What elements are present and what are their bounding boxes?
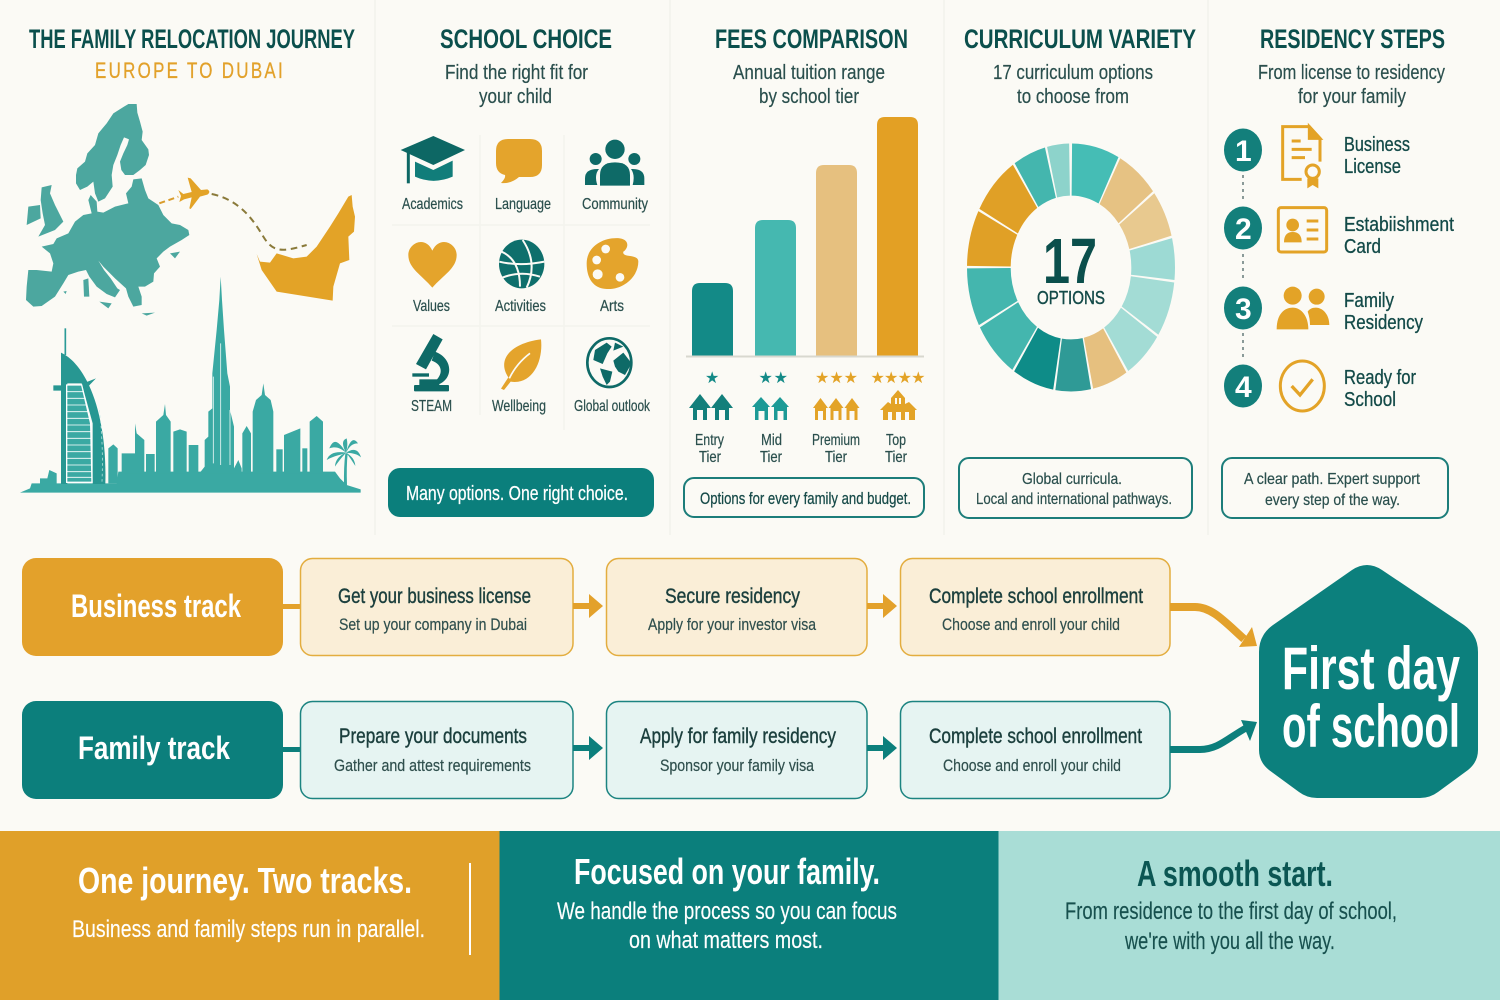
- callout: options for every family: [684, 478, 924, 517]
- panel: fees comparison: [684, 24, 926, 517]
- step: secure residency: [606, 558, 867, 656]
- label: community: Community: [582, 196, 648, 213]
- text: school choice subtitle: [445, 62, 588, 108]
- callout: a clear path: [1222, 458, 1448, 518]
- step 2: establishment card: Card: [1344, 236, 1381, 258]
- tier: mid: Mid: [761, 432, 782, 449]
- label: language: Language: [495, 196, 551, 213]
- heading: fees comparison: FEES COMPARISON: [715, 24, 908, 54]
- step 3: family residency: 3: [1235, 293, 1252, 326]
- banner: focused on your family: Focused on your family.: [574, 851, 880, 892]
- step 4: ready for school: Ready for: [1344, 367, 1416, 389]
- step 3: family residency: Family: [1344, 290, 1394, 312]
- title: THE FAMILY RELOCATION JOURNEY: [29, 24, 355, 54]
- tier: top: [870, 368, 926, 466]
- step 2: establishment card: Estabiishment: [1344, 214, 1454, 236]
- step 1: business license: Business: [1344, 134, 1410, 156]
- tier: entry: Entry: [695, 432, 724, 449]
- donut chart: 17 options: [989, 170, 1153, 365]
- icon: community: [585, 140, 644, 186]
- arrow: [867, 736, 897, 760]
- step: apply for family residency: [606, 702, 867, 798]
- arrow: [573, 594, 603, 618]
- step: apply for family residency: Sponsor your family visa: [660, 756, 814, 775]
- step 3: family residency: [1224, 286, 1423, 334]
- panel: school choice: [388, 24, 654, 517]
- step: complete school enrollment: Choose and enroll your child: [943, 756, 1121, 775]
- icon: activities basketball: [499, 240, 544, 288]
- step: apply for family residency: Apply for family residency: [640, 725, 836, 748]
- tier: premium: [812, 368, 860, 466]
- banner: focused on your family: We handle the process so you can focus: [557, 898, 897, 925]
- bar chart: fees by tier: [686, 117, 924, 356]
- panel: residency steps: [1222, 24, 1454, 518]
- text: school choice subtitle: your child: [479, 86, 552, 108]
- step: complete school enrollment: [900, 558, 1170, 656]
- tier: top: ★★★★: [870, 368, 926, 387]
- title: EUROPE TO DUBAI: [95, 58, 285, 83]
- label: activities: Activities: [495, 298, 546, 315]
- tier: entry: ★: [705, 368, 719, 387]
- track label: family: [22, 701, 283, 799]
- icon: language: [496, 139, 542, 183]
- icon: airplane: [178, 178, 209, 209]
- icon: wellbeing leaf: [501, 339, 541, 390]
- label: arts: Arts: [600, 298, 624, 315]
- banner: a smooth start: A smooth start.: [1137, 853, 1333, 894]
- track label: business: [22, 558, 283, 656]
- goal: first day of school: [1259, 565, 1478, 798]
- callout: options for every family: Options for every family and budget.: [700, 489, 911, 508]
- donut chart: 17 options: 17: [1043, 225, 1097, 297]
- icon: academics: [401, 136, 465, 183]
- icon: values heart: [408, 242, 457, 288]
- step: secure residency: Apply for your investor visa: [648, 615, 816, 634]
- label: STEAM: STEAM: [411, 398, 452, 415]
- icon: arts palette: [587, 238, 638, 289]
- text: fees subtitle: by school tier: [759, 86, 859, 108]
- banner: a smooth start: From residence to the first day of school,: [1065, 898, 1397, 925]
- tier: premium: Tier: [825, 449, 848, 466]
- flow: family track: [22, 701, 1257, 799]
- step 2: establishment card: [1224, 206, 1454, 258]
- text: fees subtitle: [733, 62, 885, 108]
- tier: mid: [752, 368, 789, 466]
- step 1: business license: [1224, 127, 1410, 188]
- tier: top: Top: [886, 432, 906, 449]
- callout: global curricula: Global curricula.: [1022, 471, 1122, 488]
- step 1: business license: 1: [1235, 135, 1252, 168]
- map: Europe: [26, 104, 189, 316]
- title: [29, 24, 355, 83]
- illustration: Dubai skyline: [20, 277, 361, 493]
- banner: a smooth start: we're with you all the way.: [1124, 928, 1335, 955]
- banner: focused on your family: on what matters most.: [629, 927, 823, 954]
- arrow: [573, 736, 603, 760]
- callout: a clear path: A clear path. Expert support: [1244, 471, 1420, 488]
- heading: curriculum variety: CURRICULUM VARIETY: [964, 24, 1196, 54]
- text: curriculum subtitle: [993, 62, 1153, 108]
- icon: global outlook: [587, 338, 632, 387]
- label: wellbeing: Wellbeing: [492, 398, 546, 415]
- banner: one journey: One journey. Two tracks.: [78, 860, 412, 901]
- panel: family relocation journey: [20, 24, 361, 493]
- flow: business track: [22, 558, 1257, 656]
- banner: a smooth start: [998, 831, 1500, 1000]
- step 4: ready for school: [1224, 361, 1416, 411]
- tier: entry: [689, 368, 733, 466]
- callout: global curricula: Local and international pathways.: [976, 491, 1172, 508]
- text: residency subtitle: [1258, 62, 1445, 108]
- callout: many options: [388, 468, 654, 517]
- step 3: family residency: Residency: [1344, 312, 1423, 334]
- step 1: business license: License: [1344, 156, 1401, 178]
- step: get your business license: Get your business license: [338, 585, 531, 608]
- step: get your business license: [300, 558, 573, 656]
- tier: premium: Premium: [812, 432, 860, 449]
- step: prepare your documents: [300, 702, 573, 798]
- step: complete school enrollment: Complete school enrollment: [929, 585, 1143, 608]
- track label: business: Business track: [71, 588, 241, 624]
- arrow: to first day: [1170, 720, 1257, 750]
- step: prepare your documents: Prepare your documents: [339, 725, 527, 748]
- tier: mid: ★★: [758, 368, 788, 387]
- callout: a clear path: every step of the way.: [1265, 492, 1400, 509]
- step: get your business license: Set up your company in Dubai: [339, 615, 527, 634]
- panel: curriculum variety: [959, 24, 1196, 518]
- text: curriculum subtitle: 17 curriculum options: [993, 62, 1153, 84]
- text: school choice subtitle: Find the right fit for: [445, 62, 588, 84]
- step 4: ready for school: School: [1344, 389, 1396, 411]
- label: values: Values: [413, 298, 450, 315]
- map: UAE: [257, 195, 355, 301]
- step 4: ready for school: 4: [1235, 371, 1252, 404]
- text: residency subtitle: for your family: [1298, 86, 1406, 108]
- callout: many options: Many options. One right choice.: [406, 483, 628, 505]
- callout: global curricula: [959, 458, 1192, 518]
- text: residency subtitle: From license to residency: [1258, 62, 1445, 84]
- label: global outlook: Global outlook: [574, 398, 651, 415]
- step: complete school enrollment: Choose and enroll your child: [942, 615, 1120, 634]
- banner: focused on your family: [500, 831, 998, 1000]
- tier: entry: Tier: [699, 449, 722, 466]
- step: prepare your documents: Gather and attest requirements: [334, 756, 531, 775]
- tier: mid: Tier: [760, 449, 783, 466]
- arrow: [867, 594, 897, 618]
- donut chart: 17 options: OPTIONS: [1037, 288, 1105, 308]
- tier: premium: ★★★: [815, 368, 858, 387]
- arrow: to first day: [1170, 607, 1257, 647]
- step: complete school enrollment: Complete school enrollment: [929, 725, 1142, 748]
- heading: school choice: SCHOOL CHOICE: [440, 24, 612, 54]
- banner: one journey: Business and family steps run in parallel.: [72, 916, 425, 943]
- banner: one journey: [0, 831, 500, 1000]
- step: secure residency: Secure residency: [665, 585, 800, 608]
- text: curriculum subtitle: to choose from: [1017, 86, 1129, 108]
- icon: STEAM microscope: [412, 334, 449, 391]
- text: fees subtitle: Annual tuition range: [733, 62, 885, 84]
- step: complete school enrollment: [900, 702, 1170, 798]
- tier: top: Tier: [885, 449, 908, 466]
- step 2: establishment card: 2: [1235, 213, 1252, 246]
- track label: family: Family track: [78, 730, 230, 766]
- label: academics: Academics: [402, 196, 463, 213]
- arrow: flight path: [159, 194, 307, 250]
